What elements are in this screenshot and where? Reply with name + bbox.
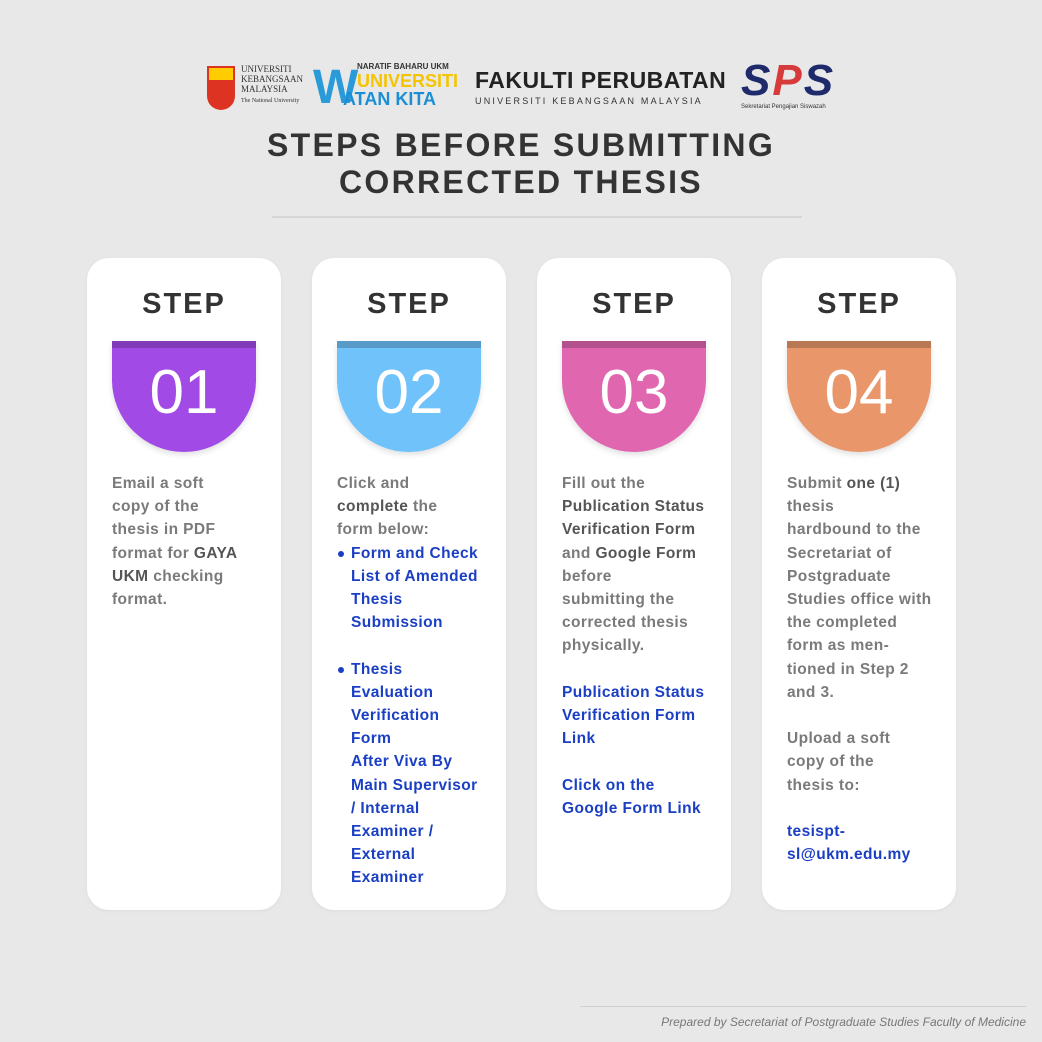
- footer credit: [580, 1006, 1026, 1029]
- logo: UKM: KEBANGSAAN: [241, 74, 303, 84]
- text: step 02: [337, 475, 478, 886]
- panel: step 04: [762, 258, 956, 910]
- heading: step 04: STEP: [817, 288, 901, 320]
- badge: 03: 03: [600, 358, 668, 427]
- text: step 03: Click on the: [562, 777, 655, 794]
- footer credit: Prepared by Secretariat of Postgraduate Studies Faculty of Medicine: [661, 1015, 1026, 1029]
- heading: step 02: STEP: [367, 288, 451, 320]
- logo: UKM: The National University: [241, 98, 299, 104]
- text: step 03: Verification Form: [562, 521, 695, 538]
- text: step 01: UKM checking: [112, 568, 224, 585]
- text: step 04: the completed: [787, 614, 897, 631]
- logo: Universiti Watan Kita: NARATIF BAHARU UKM: [357, 62, 449, 71]
- badge: 01: 01: [150, 358, 218, 427]
- text: step 04: hardbound to the: [787, 521, 921, 538]
- text: step 02: Thesis: [351, 591, 403, 608]
- logo: Universiti Watan Kita: [313, 61, 458, 114]
- text: step 04: Submit one (1): [787, 475, 900, 492]
- text: step 01: format for GAYA: [112, 545, 237, 562]
- logo: Fakulti Perubatan: [475, 67, 726, 106]
- logo: Fakulti Perubatan: UNIVERSITI KEBANGSAAN MALAYSIA: [475, 96, 703, 106]
- badge: 02: [337, 341, 481, 452]
- text: step 04: tioned in Step 2: [787, 661, 909, 678]
- text: step 04: and 3.: [787, 684, 834, 701]
- text: step 04: thesis to:: [787, 777, 860, 794]
- logo: SPS: SPS: [741, 56, 835, 105]
- text: step 04: Upload a soft: [787, 730, 890, 747]
- text: step 02: Submission: [351, 614, 443, 631]
- text: step 04: form as men-: [787, 637, 889, 654]
- panel: step 01: [87, 258, 281, 910]
- badge: 04: 04: [825, 358, 893, 427]
- title: STEPS BEFORE SUBMITTING: [267, 127, 775, 163]
- badge: 04: [787, 341, 931, 452]
- logo: SPS: Sekretariat Pengajian Siswazah: [741, 104, 826, 110]
- logo: Universiti Watan Kita: ATAN KITA: [343, 89, 436, 109]
- text: step 02: Verification: [351, 707, 439, 724]
- text: step 03: Verification Form: [562, 707, 695, 724]
- text: step 03: Publication Status: [562, 498, 704, 515]
- text: step 02: form below:: [337, 521, 429, 538]
- text: step 02: Thesis: [351, 661, 403, 678]
- text: step 01: Email a soft: [112, 475, 204, 492]
- text: step 03: Fill out the: [562, 475, 645, 492]
- text: step 04: sl@ukm.edu.my: [787, 846, 911, 863]
- logo: UKM: MALAYSIA: [241, 84, 288, 94]
- badge: 02: 02: [375, 358, 443, 427]
- text: step 01: thesis in PDF: [112, 521, 215, 538]
- text: step 03: [562, 475, 704, 817]
- text: step 01: format.: [112, 591, 167, 608]
- text: step 04: Studies office with: [787, 591, 932, 608]
- badge: 01: [112, 341, 256, 452]
- title: [267, 127, 775, 200]
- logo: Fakulti Perubatan: FAKULTI PERUBATAN: [475, 67, 726, 93]
- text: step 02: Main Supervisor: [351, 777, 478, 794]
- text: step 03: Google Form Link: [562, 800, 701, 817]
- heading: step 03: STEP: [592, 288, 676, 320]
- panel: step 02: [312, 258, 506, 910]
- logo: UKM: [207, 64, 303, 110]
- text: step 04: thesis: [787, 498, 834, 515]
- logo: UKM: UNIVERSITI: [241, 64, 292, 74]
- text: step 04: copy of the: [787, 753, 874, 770]
- text: step 02: List of Amended: [351, 568, 478, 585]
- logo: Universiti Watan Kita: W: [313, 61, 358, 114]
- logo: Universiti Watan Kita: UNIVERSITI: [357, 71, 458, 91]
- panel: step 03: [537, 258, 731, 910]
- text: step 02: / Internal: [351, 800, 420, 817]
- text: step 03: corrected thesis: [562, 614, 688, 631]
- text: step 02: Form and Check: [351, 545, 478, 562]
- text: step 02: After Viva By: [351, 753, 452, 770]
- text: step 02: Examiner /: [351, 823, 433, 840]
- text: step 02: External: [351, 846, 415, 863]
- text: step 02: complete the: [337, 498, 437, 515]
- text: step 04: Secretariat of: [787, 545, 892, 562]
- text: step 03: Link: [562, 730, 595, 747]
- text: step 03: and Google Form: [562, 545, 696, 562]
- logos row: [207, 56, 835, 114]
- text: step 02: Click and: [337, 475, 410, 492]
- text: step 03: submitting the: [562, 591, 674, 608]
- heading: step 01: STEP: [142, 288, 226, 320]
- text: step 01: [112, 475, 237, 608]
- text: step 04: Postgraduate: [787, 568, 891, 585]
- text: step 02: Examiner: [351, 869, 424, 886]
- text: step 03: physically.: [562, 637, 645, 654]
- text: step 01: copy of the: [112, 498, 199, 515]
- text: step 02: Form: [351, 730, 391, 747]
- text: step 03: Publication Status: [562, 684, 704, 701]
- text: step 02: Evaluation: [351, 684, 433, 701]
- text: step 04: [787, 475, 932, 863]
- badge: 03: [562, 341, 706, 452]
- title: CORRECTED THESIS: [339, 164, 703, 200]
- text: step 03: before: [562, 568, 612, 585]
- text: step 04: tesispt-: [787, 823, 845, 840]
